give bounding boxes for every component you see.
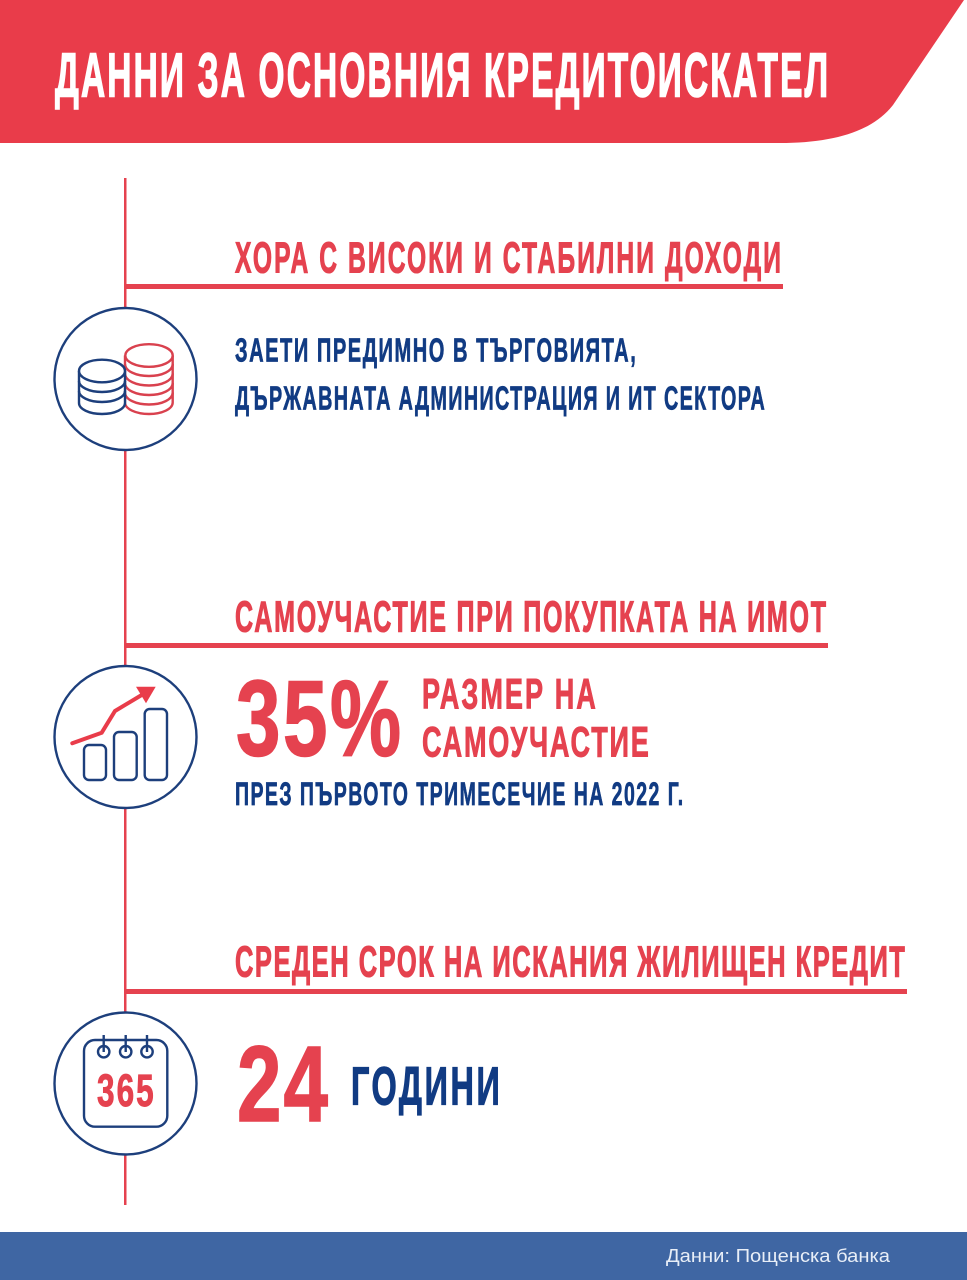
label: down payment size: РАЗМЕР НА [422,669,596,718]
title: ДАННИ ЗА ОСНОВНИЯ КРЕДИТОИСКАТЕЛ [55,40,828,110]
heading: down payment: САМОУЧАСТИЕ ПРИ ПОКУПКАТА НА ИМОТ [235,592,826,641]
footer bar [0,1232,967,1280]
heading rule [125,989,907,994]
heading rule [125,643,828,648]
text: employment sectors: ДЪРЖАВНАТА АДМИНИСТРАЦИЯ И ИТ СЕКТОРА [235,379,765,417]
section: loan term [54,936,907,1154]
label: years: ГОДИНИ [351,1057,500,1117]
section: high income [54,233,783,450]
timeline vertical line [124,178,126,1205]
text: employment sectors [235,331,765,417]
section: down payment [54,592,828,812]
stat: 35 percent: 35% [236,659,401,779]
heading: high income: ХОРА С ВИСОКИ И СТАБИЛНИ ДОХОДИ [235,233,781,282]
icon: coins [54,308,196,450]
text: period: ПРЕЗ ПЪРВОТО ТРИМЕСЕЧИЕ НА 2022 Г. [235,776,683,812]
text: employment sectors: ЗАЕТИ ПРЕДИМНО В ТЪРГОВИЯТА, [235,331,636,369]
label: down payment size: САМОУЧАСТИЕ [422,717,649,766]
stat: 24: 24 [237,1024,328,1145]
heading rule [125,284,783,289]
label: down payment size [422,669,649,766]
source note: Данни: Пощенска банка [666,1246,891,1266]
icon: growth chart [54,666,196,808]
icon: calendar [54,1012,196,1154]
heading: loan term: СРЕДЕН СРОК НА ИСКАНИЯ ЖИЛИЩЕН КРЕДИТ [235,936,905,986]
header banner [0,0,964,143]
icon: calendar: 365 [97,1067,154,1116]
